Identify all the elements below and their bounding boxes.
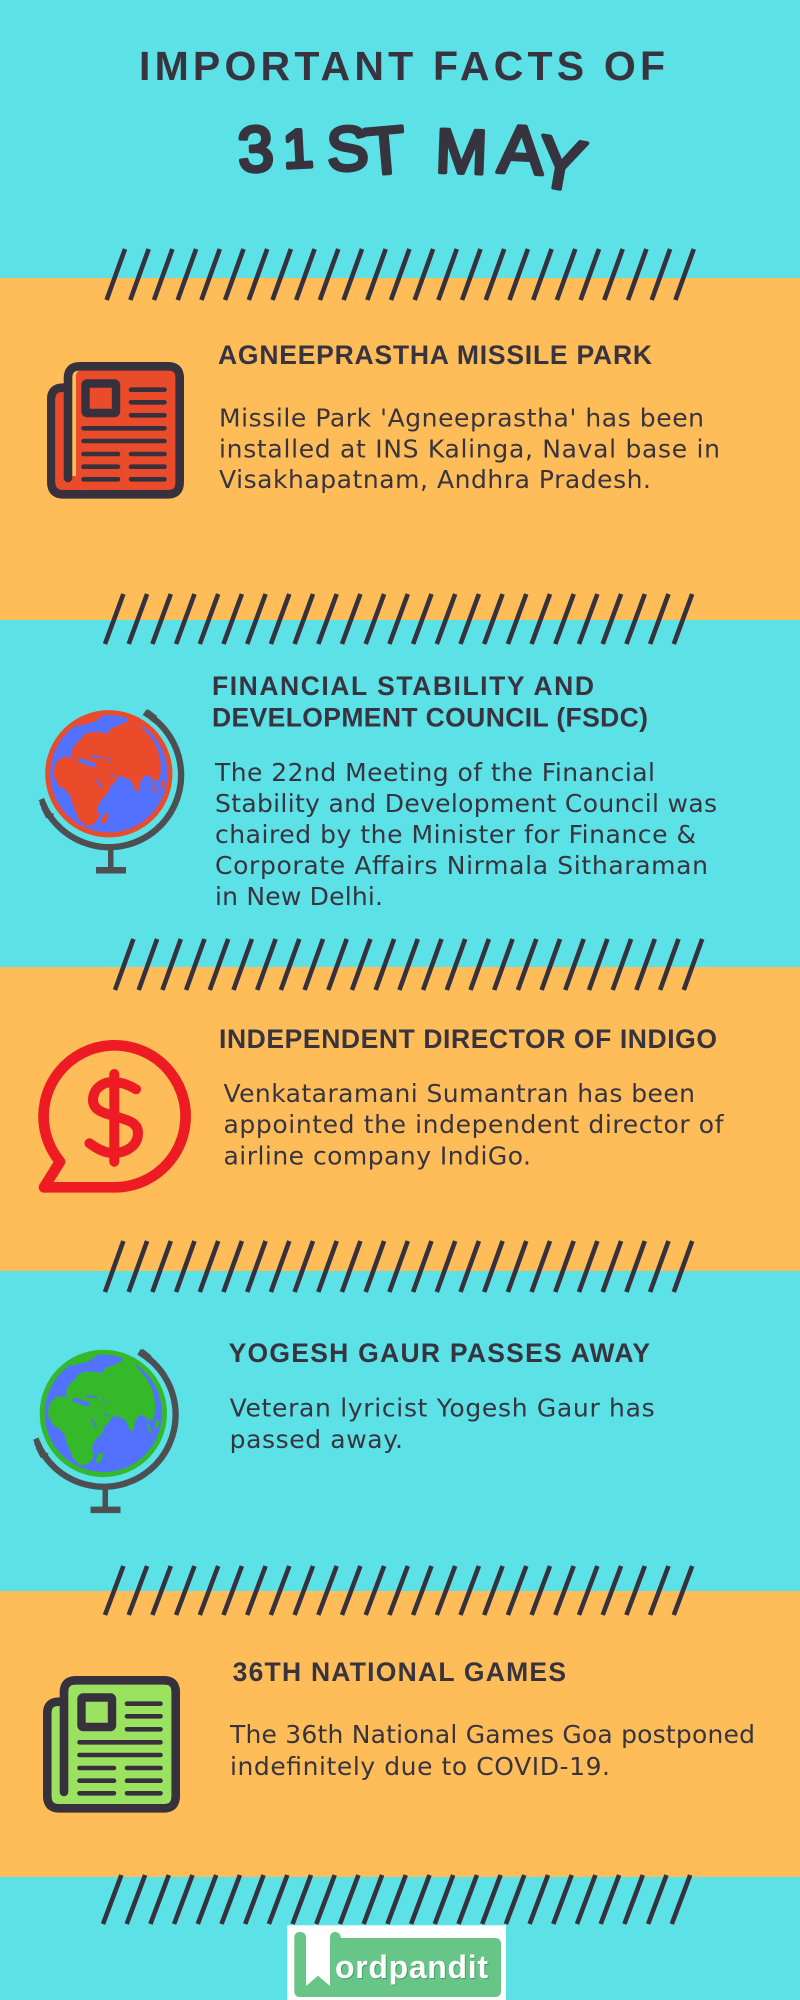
text block: agneeprastha: Visakhapatnam, Andhra Pradesh. (219, 465, 651, 494)
heading: financial stability and development council: DEVELOPMENT COUNCIL (FSDC) (212, 702, 648, 732)
stripes: divider three (115, 939, 702, 990)
text block: fsdc (214, 758, 717, 911)
title: 31st may: S (325, 114, 370, 185)
heading: yogesh gaur passes away: YOGESH GAUR PASSES AWAY (229, 1338, 650, 1368)
text block: indigo: Venkataramani Sumantran has been (224, 1079, 695, 1108)
text block: fsdc: Corporate Affairs Nirmala Sitharaman (215, 851, 708, 880)
icon: green globe (34, 1349, 176, 1513)
text block: fsdc: in New Delhi. (215, 882, 383, 911)
title: 31st may: Y (530, 121, 591, 208)
text block: yogesh gaur: passed away. (230, 1425, 403, 1454)
text block: fsdc: chaired by the Minister for Finance & (215, 820, 696, 849)
text block: national games (229, 1720, 755, 1781)
heading: independent director of indigo: INDEPENDENT DIRECTOR OF INDIGO (219, 1024, 717, 1054)
icon: red globe (40, 709, 181, 874)
stripes: divider one (107, 249, 694, 300)
icon: red newspaper (51, 366, 180, 494)
logo: wordpandit: ordpandit (335, 1949, 488, 1985)
title: 31st may: A (496, 111, 546, 189)
heading: agneeprastha missile park: AGNEEPRASTHA MISSILE PARK (218, 340, 652, 370)
stripes: divider six (103, 1875, 690, 1924)
heading: financial stability and development council: FINANCIAL STABILITY AND (212, 671, 594, 701)
text block: agneeprastha (219, 404, 720, 494)
icon: dollar speech bubble (44, 1045, 186, 1187)
text block: yogesh gaur (230, 1394, 655, 1454)
text block: agneeprastha: Missile Park 'Agneeprastha' has been (219, 404, 704, 432)
panel: agneeprastha band (0, 278, 800, 620)
icon: green newspaper (47, 1680, 176, 1808)
panel: title background (0, 0, 800, 278)
panel: footer band (0, 1877, 800, 2000)
panel: national games band (0, 1591, 800, 1877)
heading: 36th national games: 36TH NATIONAL GAMES (233, 1657, 566, 1687)
title: important facts of: IMPORTANT FACTS OF (139, 43, 665, 89)
panel: indigo band (0, 967, 800, 1271)
text block: national games: The 36th National Games Goa postponed (229, 1720, 755, 1749)
heading: financial stability and development council (212, 671, 648, 732)
text block: indigo (224, 1079, 725, 1170)
text block: national games: indefinitely due to COVID-19. (230, 1752, 610, 1781)
panel: yogesh gaur band (0, 1271, 800, 1591)
stripes: divider four (105, 1241, 692, 1292)
text block: fsdc: The 22nd Meeting of the Financial (214, 758, 655, 787)
text block: yogesh gaur: Veteran lyricist Yogesh Gaur has (230, 1394, 655, 1423)
title: 31st may: M (435, 117, 489, 188)
stripes: divider five (105, 1566, 692, 1615)
title: 31st may: 1 (281, 118, 315, 180)
stripes: divider two (105, 594, 692, 644)
panel: fsdc band (0, 620, 800, 967)
title: 31st may: 3 (236, 112, 275, 186)
text block: indigo: airline company IndiGo. (224, 1142, 531, 1170)
text block: fsdc: Stability and Development Council was (215, 789, 717, 818)
title: 31st may: T (362, 112, 408, 189)
logo: wordpandit (287, 1925, 506, 2000)
text block: agneeprastha: installed at INS Kalinga, Naval base in (219, 434, 720, 464)
text block: indigo: appointed the independent director of (224, 1110, 725, 1139)
